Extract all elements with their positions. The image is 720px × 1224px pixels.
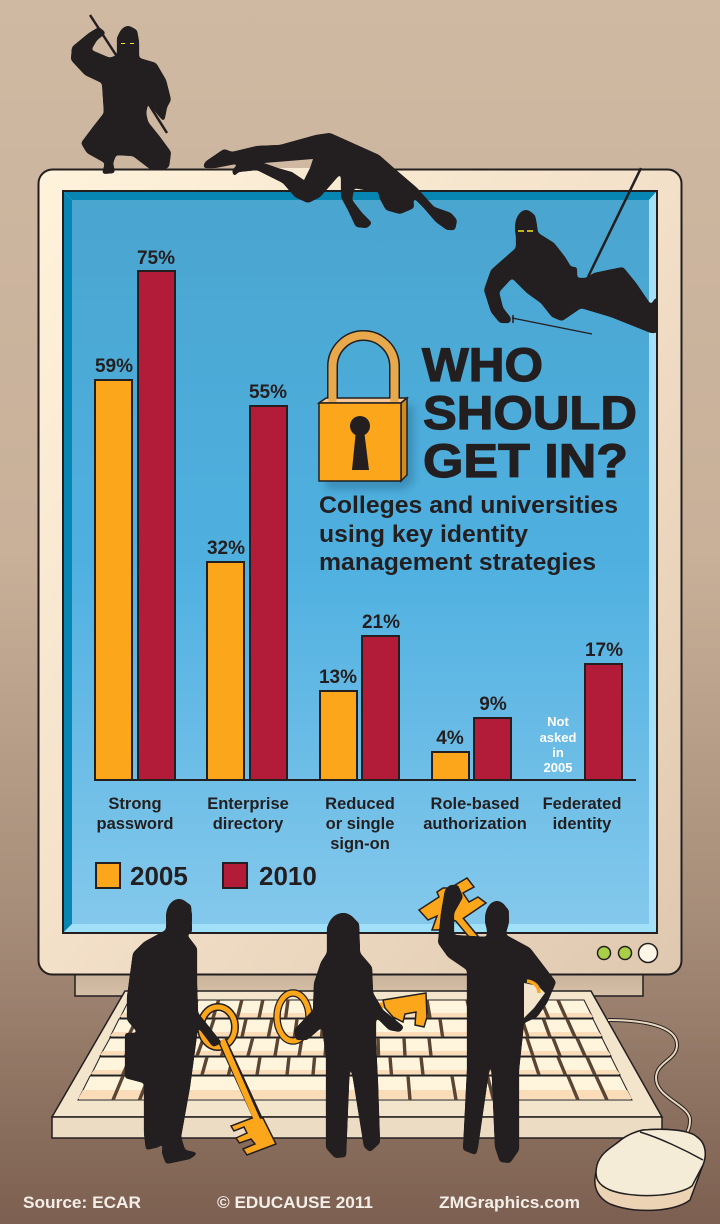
legend: 2010	[259, 861, 317, 891]
screen	[72, 200, 649, 924]
footer credits: © EDUCAUSE 2011	[217, 1194, 373, 1212]
footer credits	[23, 1194, 580, 1212]
category labels: Federated	[543, 795, 621, 813]
bar chart	[95, 248, 636, 891]
not asked note: 2005	[544, 760, 572, 775]
mouse	[595, 1129, 705, 1210]
monitor casing	[38, 170, 682, 974]
value labels: 59%	[95, 356, 133, 377]
key separators	[113, 1000, 607, 1100]
not asked note: Not	[547, 714, 569, 729]
ninja crouching on monitor	[71, 15, 171, 174]
category labels: authorization	[423, 815, 527, 833]
category labels: Enterprise	[207, 795, 289, 813]
value labels: 4%	[436, 728, 464, 749]
category labels: or single	[326, 815, 394, 833]
keyboard front	[52, 1117, 662, 1138]
bar: federated identity	[585, 664, 622, 780]
category labels: Reduced	[325, 795, 395, 813]
monitor	[38, 170, 682, 974]
category labels: directory	[213, 815, 284, 833]
leg gap of climber	[264, 159, 313, 180]
ninja rappelling on rope	[484, 168, 657, 334]
monitor stand	[75, 970, 643, 996]
value labels: 32%	[207, 538, 245, 559]
subtitle: Colleges and universities	[319, 492, 618, 519]
value labels: 75%	[137, 248, 175, 269]
category labels: Strong	[108, 795, 162, 813]
not asked note: in	[552, 745, 564, 760]
subtitle	[319, 492, 618, 576]
chart baseline	[95, 779, 636, 781]
key held by left person	[201, 1007, 276, 1155]
keyboard	[52, 991, 662, 1138]
footer credits: ZMGraphics.com	[439, 1194, 580, 1212]
bars: enterprise directory	[207, 406, 287, 780]
category labels: password	[96, 815, 174, 833]
category labels	[96, 795, 621, 853]
category labels: identity	[553, 815, 612, 833]
icon: padlock	[319, 336, 414, 490]
key front faces	[78, 1013, 632, 1099]
key rows	[78, 1000, 632, 1100]
title	[422, 338, 637, 487]
bars: strong password	[95, 271, 175, 780]
title: SHOULD	[423, 386, 637, 439]
person with briefcase	[125, 899, 222, 1164]
title: WHO	[422, 338, 543, 391]
key held up by right person	[419, 878, 486, 942]
category labels: Role-based	[431, 795, 519, 813]
value labels: 17%	[585, 640, 623, 661]
legend	[96, 861, 317, 891]
value labels: 13%	[319, 667, 357, 688]
key held by middle person	[277, 993, 427, 1041]
bars: reduced or single sign-on	[320, 636, 399, 780]
title: GET IN?	[423, 434, 628, 487]
figure climbing over monitor	[203, 133, 457, 230]
person with long hair	[294, 913, 404, 1158]
footer credits: Source: ECAR	[23, 1194, 141, 1212]
category labels: sign-on	[330, 835, 390, 853]
value labels: 21%	[362, 612, 400, 633]
subtitle: using key identity	[319, 521, 529, 548]
value labels: 9%	[479, 694, 507, 715]
value labels	[95, 248, 623, 749]
legend: 2005	[130, 861, 188, 891]
subtitle: management strategies	[319, 549, 596, 576]
keyboard body	[52, 991, 662, 1117]
value labels: 55%	[249, 382, 287, 403]
not asked note: asked	[540, 730, 576, 745]
mouse cable	[608, 1020, 690, 1135]
gap under right person's arm	[524, 981, 545, 1018]
bars: role-based authorization	[432, 718, 511, 780]
person reaching up	[438, 885, 556, 1163]
screen bevel	[63, 191, 657, 933]
monitor buttons	[598, 944, 658, 962]
